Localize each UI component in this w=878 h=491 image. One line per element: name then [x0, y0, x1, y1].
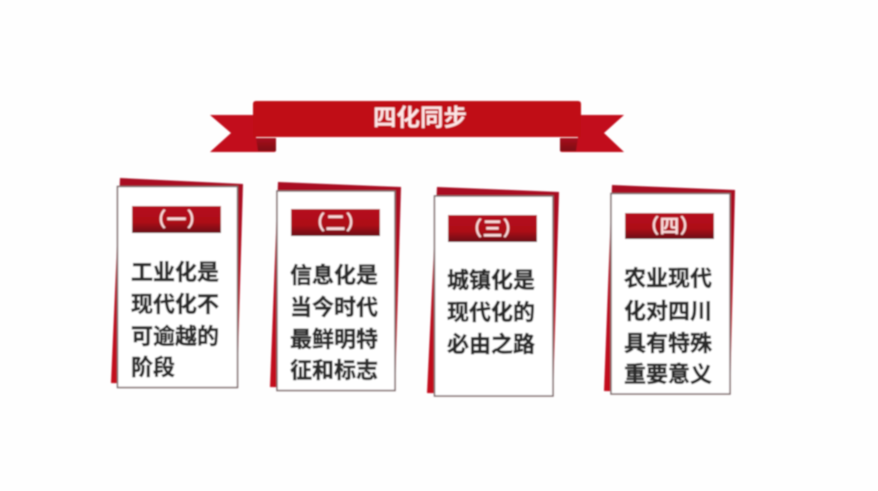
banner: 四化同步 — [210, 101, 624, 152]
card 4 — [604, 185, 735, 394]
card 2 text: 当今时代 — [290, 295, 378, 320]
card 3 text: 必由之路 — [447, 332, 535, 357]
banner main band — [253, 101, 581, 137]
card 4 number: （四） — [640, 215, 700, 238]
banner right tail — [560, 115, 624, 152]
card 2 white panel — [277, 191, 395, 390]
card 4 white panel — [611, 194, 730, 394]
card 3 text: 城镇化是 — [447, 268, 535, 293]
card 4 text — [624, 266, 712, 387]
card 2 text: 最鲜明特 — [290, 327, 378, 352]
card 1 text: 现代化不 — [131, 292, 219, 317]
card 2 number: （二） — [306, 212, 366, 234]
card 4 label — [625, 213, 714, 239]
card 1 text — [131, 260, 219, 380]
card 2 text: 征和标志 — [290, 358, 378, 383]
card 4 text: 重要意义 — [624, 362, 712, 387]
card 4 text: 农业现代 — [624, 266, 712, 291]
card 1 text: 工业化是 — [131, 260, 219, 285]
card 2 red back — [270, 182, 401, 390]
banner fold shadows — [256, 138, 578, 151]
card 3 — [427, 187, 559, 396]
card 4 red back — [604, 185, 735, 394]
card 4 text: 化对四川 — [624, 299, 712, 324]
card 2 — [270, 182, 401, 390]
card 1 label — [132, 206, 221, 233]
card 1 — [111, 178, 243, 388]
card 1 white panel — [118, 186, 238, 388]
card 2 label — [291, 209, 380, 236]
card 1 text: 阶段 — [131, 355, 175, 380]
banner title: 四化同步 — [373, 104, 467, 130]
card 2 text: 信息化是 — [290, 263, 378, 288]
card 3 label — [448, 215, 537, 242]
card 3 number: （三） — [462, 218, 522, 240]
card 3 text: 现代化的 — [447, 300, 535, 325]
card 1 number: （一） — [146, 208, 206, 232]
banner left tail — [210, 115, 276, 152]
card 2 text — [290, 263, 378, 383]
card 1 text: 可逾越的 — [131, 324, 219, 349]
card 4 text: 具有特殊 — [624, 331, 712, 356]
card 3 white panel — [434, 196, 553, 396]
card 3 red back — [427, 187, 559, 396]
card 1 red back — [111, 178, 243, 387]
card 3 text — [447, 268, 535, 357]
